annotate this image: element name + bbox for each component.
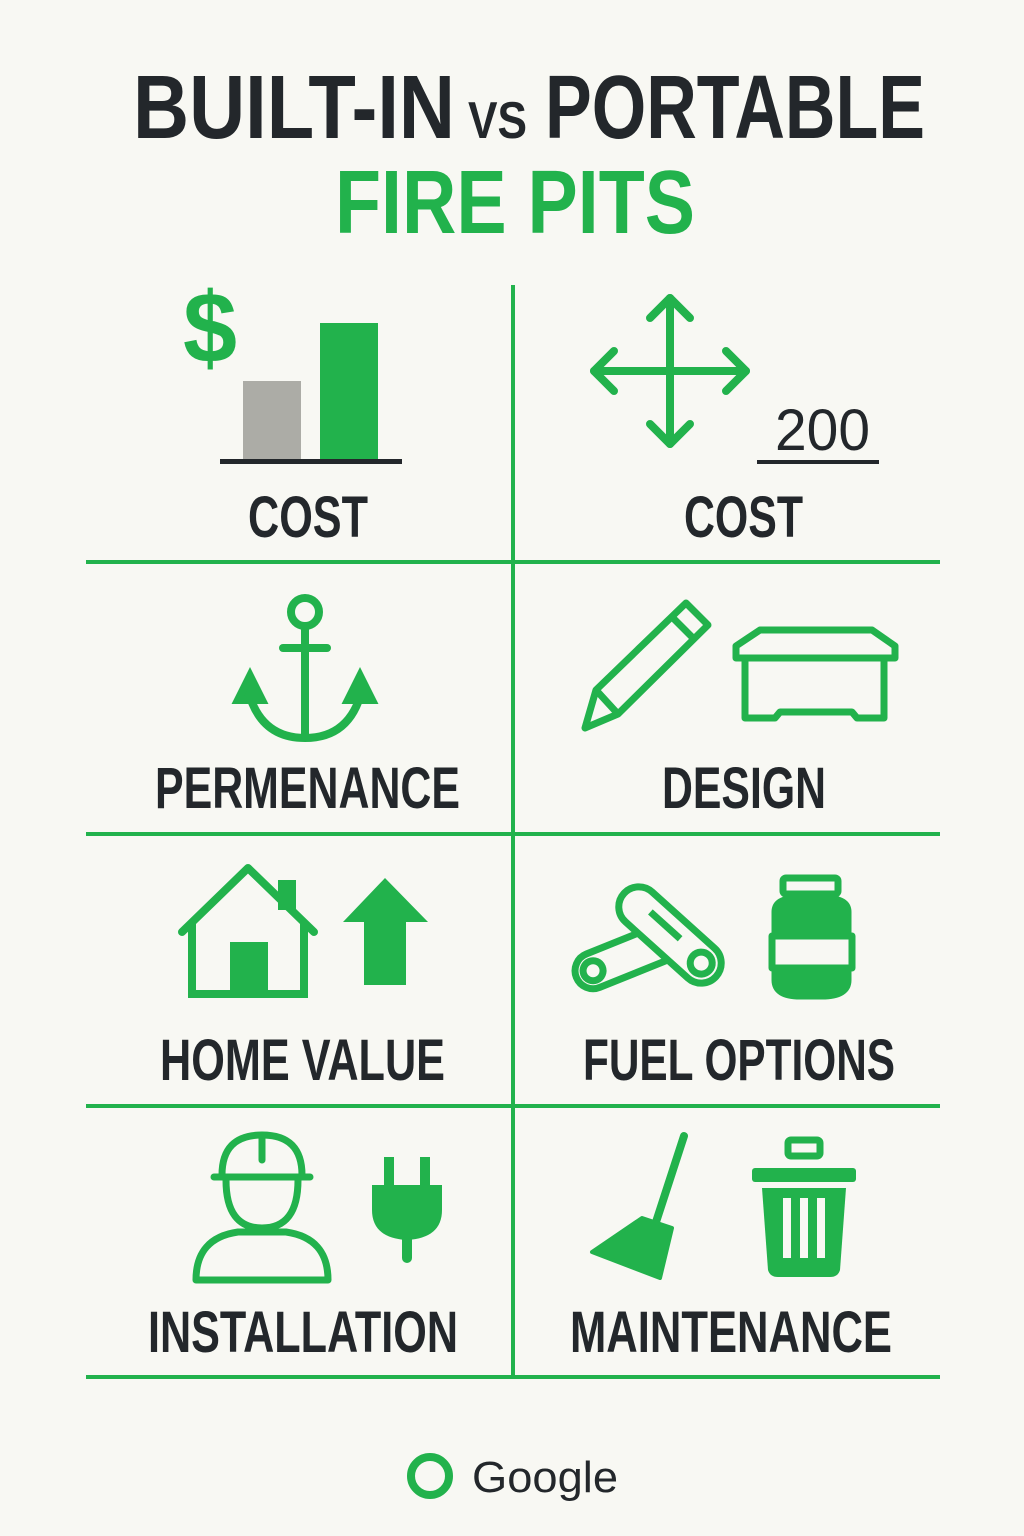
panel: maintenance <box>570 1136 892 1365</box>
title: PORTABLE <box>545 58 925 158</box>
panel: cost portable: 200 <box>775 398 870 463</box>
icon: anchor <box>238 598 372 738</box>
panel: permanence: PERMENANCE <box>155 756 460 821</box>
icon: logs and propane tank <box>570 878 852 996</box>
panel: cost built-in <box>183 272 402 550</box>
icon: house and up arrow <box>182 868 428 994</box>
panel: cost portable <box>594 298 879 550</box>
subtitle: FIRE PITS <box>335 153 695 253</box>
icon: cost bar chart: $ <box>183 272 237 384</box>
icon: move arrows <box>594 298 746 444</box>
panel: home value <box>160 868 445 1093</box>
panel: home value: HOME VALUE <box>160 1028 445 1093</box>
title: VS <box>468 92 527 150</box>
title: BUILT-IN <box>133 58 455 158</box>
title <box>133 58 925 158</box>
panel: cost built-in: COST <box>248 485 368 550</box>
panel: design: DESIGN <box>662 756 826 821</box>
icon: broom and trash can <box>592 1136 856 1278</box>
panel: fuel options <box>570 878 895 1093</box>
panel: installation <box>148 1135 458 1365</box>
panel: permanence <box>155 598 460 821</box>
panel: fuel options: FUEL OPTIONS <box>583 1028 895 1093</box>
icon: cost bar chart <box>183 272 402 464</box>
panel: cost portable: COST <box>684 485 803 550</box>
panel: design <box>585 603 895 821</box>
panel: maintenance: MAINTENANCE <box>570 1300 892 1365</box>
footer logo <box>411 1453 618 1502</box>
panel: installation: INSTALLATION <box>148 1300 458 1365</box>
icon: pencil and box <box>585 603 895 728</box>
footer logo: Google <box>472 1453 618 1502</box>
icon: worker and plug <box>196 1135 442 1280</box>
